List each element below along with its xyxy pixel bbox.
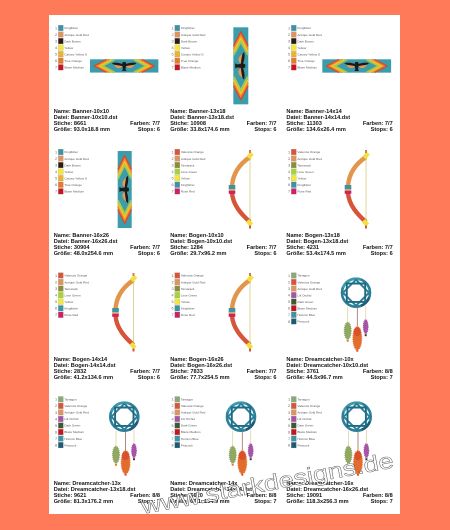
legend: Dreamcatcher-13x thread colours [55, 396, 89, 448]
embroidery: vertical banner [118, 151, 132, 228]
legend: Banner-16x26 thread colours: 5 [55, 177, 57, 181]
details: Banner-10x10: Stops: 6 [138, 127, 160, 133]
details: Dreamcatcher-10x: Stiche: 3761 [286, 369, 319, 375]
legend: Bogen-14x14 thread colours: 7 [55, 313, 57, 317]
details: Dreamcatcher-16x [286, 481, 393, 505]
details: Dreamcatcher-14x: Name: Dreamcatcher-14x [170, 481, 238, 487]
details: Bogen-10x10 [170, 233, 276, 257]
legend: Banner-13x18 thread colours: Blaze Medium [181, 66, 201, 70]
embroidery: bow [229, 273, 254, 352]
legend: Dreamcatcher-13x thread colours: 5 [55, 424, 57, 428]
legend: Bogen-13x18 thread colours: 6 [288, 183, 290, 187]
legend: Bogen-16x26 thread colours: Valencia Orange [181, 274, 204, 278]
details: Banner-16x26: Stiche: 30904 [54, 245, 90, 251]
legend: Bogen-10x10 thread colours: Tamarack [181, 163, 195, 167]
legend: Bogen-16x26 thread colours: Yellow [181, 300, 190, 304]
details: Banner-10x10: Größe: 93.0x18.8 mm [54, 127, 110, 133]
legend: Dreamcatcher-14x thread colours [172, 396, 206, 448]
legend: Dreamcatcher-16x thread colours: Dark Green [297, 424, 314, 428]
legend: Bogen-16x26 thread colours: Antique Gold Red [181, 280, 206, 284]
details: Dreamcatcher-14x: Farben: 8/8 [247, 493, 276, 499]
details: Banner-13x18: Stiche: 10908 [170, 121, 206, 127]
legend: Banner-10x10 thread colours: Yellow [64, 46, 74, 50]
legend: Bogen-14x14 thread colours: Antique Gold Red [64, 280, 89, 284]
legend: Bogen-10x10 thread colours: 2 [172, 157, 174, 161]
legend: Dreamcatcher-10x thread colours: Lilt Orchid [297, 293, 312, 297]
details: Banner-10x10: Name: Banner-10x10 [54, 109, 109, 115]
legend: Banner-10x10 thread colours: 3 [55, 40, 57, 44]
legend: Banner-13x18 thread colours: 6 [172, 59, 174, 63]
legend: Banner-10x10 thread colours: Canary Yellow G [64, 52, 88, 56]
watermark: website address: www.starkdesigns.de [138, 448, 396, 519]
legend: Dreamcatcher-10x thread colours: Peacock [297, 320, 310, 324]
legend: Dreamcatcher-13x thread colours: Horizon Blue [64, 437, 82, 441]
legend: Dreamcatcher-16x thread colours: Lilt Orchid [297, 417, 312, 421]
details: Banner-16x26: Stops: 6 [138, 251, 160, 257]
legend: Banner-16x26 thread colours: Antique Gold Red [64, 157, 89, 161]
catalogue entry: Bogen-14x14 [54, 273, 160, 381]
legend: Dreamcatcher-16x thread colours: Blaze Medium [297, 430, 317, 434]
legend: Banner-16x26 thread colours: Blaze Medium [64, 190, 84, 194]
legend: Bogen-13x18 thread colours: Antique Gold Red [297, 157, 322, 161]
legend: Banner-16x26 thread colours: Kingfisher [64, 150, 78, 154]
legend: Banner-16x26 thread colours: 2 [55, 157, 57, 161]
details: Banner-14x14: Farben: 7/7 [363, 121, 393, 127]
embroidery: dreamcatcher [342, 279, 370, 352]
details: Dreamcatcher-14x: Stops: 7 [254, 499, 276, 505]
legend: Banner-16x26 thread colours: 6 [55, 183, 57, 187]
legend: Banner-14x14 thread colours: 1 [288, 26, 290, 30]
details: Bogen-14x14: Name: Bogen-14x14 [54, 357, 108, 363]
legend: Dreamcatcher-14x thread colours: 1 [172, 398, 174, 402]
legend: Dreamcatcher-14x thread colours: Blaze Medium [181, 430, 201, 434]
legend: Banner-10x10 thread colours: 1 [55, 26, 57, 30]
legend: Bogen-14x14 thread colours: Lime Green [64, 293, 81, 297]
details: Bogen-13x18: Stiche: 4231 [286, 245, 319, 251]
legend: Bogen-14x14 thread colours: Yellow [64, 300, 74, 304]
embroidery: bow [112, 273, 137, 352]
legend: Dreamcatcher-10x thread colours: Blaze Medium [297, 306, 317, 310]
catalogue entry: Dreamcatcher-13x [54, 396, 160, 505]
legend: Banner-13x18 thread colours: Dark Brown [181, 39, 197, 43]
legend: Bogen-14x14 thread colours [55, 273, 89, 318]
details: Bogen-10x10: Stiche: 1284 [170, 245, 204, 251]
legend: Bogen-16x26 thread colours: 6 [172, 307, 174, 311]
legend: Dreamcatcher-14x thread colours: 4 [172, 417, 174, 421]
details: Bogen-14x14: Größe: 41.2x134.6 mm [54, 375, 113, 381]
legend: Banner-14x14 thread colours: 3 [288, 40, 290, 44]
legend: Dreamcatcher-14x thread colours: Peacock [181, 443, 193, 447]
legend: Banner-10x10 thread colours: Dark Brown [64, 39, 81, 43]
legend: Banner-13x18 thread colours: 1 [172, 26, 174, 30]
details: Dreamcatcher-13x: Stops: 7 [138, 499, 160, 505]
details: Bogen-16x26: Datei: Bogen-16x26.dst [170, 363, 232, 369]
legend: Dreamcatcher-14x thread colours: Tarragon [181, 397, 193, 401]
legend: Bogen-14x14 thread colours: 1 [55, 274, 57, 278]
legend: Dreamcatcher-10x thread colours: Dark Green [297, 300, 314, 304]
white sheet panel [49, 15, 400, 514]
details: Dreamcatcher-14x [170, 481, 276, 505]
legend: Bogen-10x10 thread colours: Kingfisher [181, 183, 195, 187]
details: Dreamcatcher-16x: Stops: 7 [371, 499, 393, 505]
details: Banner-16x26: Farben: 7/7 [130, 245, 160, 251]
legend: Banner-13x18 thread colours: Canary Yellow G [181, 52, 204, 56]
legend: Bogen-16x26 thread colours: 4 [172, 294, 174, 298]
legend: Dreamcatcher-10x thread colours: Valencia Orange [297, 280, 320, 284]
legend: Banner-13x18 thread colours: 7 [172, 66, 174, 70]
details: Bogen-16x26 [170, 357, 276, 381]
legend: Dreamcatcher-16x thread colours: Tarragon [297, 397, 310, 401]
legend: Banner-14x14 thread colours: 6 [288, 59, 290, 63]
details: Banner-16x26: Datei: Banner-16x26.dst [54, 239, 118, 245]
legend: Bogen-10x10 thread colours: Rose Red [181, 190, 195, 194]
details: Bogen-16x26: Stops: 6 [254, 375, 276, 381]
legend: Bogen-10x10 thread colours: Antique Gold Red [181, 157, 206, 161]
catalogue entry: Dreamcatcher-16x [286, 396, 393, 505]
legend: Dreamcatcher-10x thread colours: 4 [288, 294, 290, 298]
legend: Banner-14x14 thread colours: Canary Yellow G [297, 52, 321, 56]
legend: Dreamcatcher-16x thread colours: 5 [288, 424, 290, 428]
legend: Bogen-16x26 thread colours [172, 273, 206, 318]
embroidery: dreamcatcher [343, 403, 371, 476]
legend: Bogen-13x18 thread colours: Kingfisher [297, 183, 311, 187]
legend: Dreamcatcher-16x thread colours: 4 [288, 417, 290, 421]
details: Bogen-13x18: Name: Bogen-13x18 [286, 233, 340, 239]
legend: Banner-16x26 thread colours: Yellow [64, 170, 74, 174]
catalogue entry: Dreamcatcher-10x [286, 273, 393, 381]
legend: Dreamcatcher-13x thread colours: 1 [55, 398, 57, 402]
legend: Dreamcatcher-16x thread colours: 1 [288, 398, 290, 402]
details: Dreamcatcher-16x: Farben: 8/8 [363, 493, 393, 499]
legend: Bogen-10x10 thread colours: 4 [172, 170, 174, 174]
legend: Bogen-14x14 thread colours: 5 [55, 300, 57, 304]
legend: Banner-14x14 thread colours: Antique Gold Red [297, 33, 322, 37]
legend: Banner-13x18 thread colours [172, 25, 206, 70]
catalogue entry: Dreamcatcher-14x [170, 396, 276, 505]
legend: Dreamcatcher-14x thread colours: 7 [172, 437, 174, 441]
details: Bogen-16x26: Größe: 77.7x254.5 mm [170, 375, 230, 381]
embroidery: horizontal banner [322, 59, 391, 73]
catalogue entry: Bogen-10x10 [170, 149, 276, 257]
legend: Dreamcatcher-10x thread colours: 8 [288, 320, 290, 324]
legend: Banner-10x10 thread colours: 2 [55, 33, 57, 37]
details: Bogen-14x14: Stops: 6 [138, 375, 160, 381]
details: Banner-13x18 [170, 109, 276, 133]
legend: Banner-10x10 thread colours: 5 [55, 53, 57, 57]
details: Dreamcatcher-10x: Stops: 7 [371, 375, 393, 381]
details: Banner-10x10: Stiche: 8661 [54, 121, 86, 127]
embroidery: dreamcatcher [227, 403, 255, 476]
details: Banner-13x18: Farben: 7/7 [247, 121, 276, 127]
legend: Bogen-16x26 thread colours: Tamarack [181, 287, 195, 291]
details: Banner-14x14: Größe: 134.6x26.4 mm [286, 127, 346, 133]
legend: Bogen-13x18 thread colours: Rose Red [297, 190, 311, 194]
legend: Dreamcatcher-14x thread colours: Horizon Blue [181, 437, 199, 441]
details: Dreamcatcher-16x: Name: Dreamcatcher-16x [286, 481, 354, 487]
catalogue entry: Bogen-16x26 [170, 273, 276, 381]
legend: Dreamcatcher-13x thread colours: Tarragon [64, 397, 77, 401]
details: Bogen-16x26: Farben: 7/7 [247, 369, 276, 375]
legend: Banner-14x14 thread colours: 2 [288, 33, 290, 37]
legend: Dreamcatcher-13x thread colours: 4 [55, 417, 57, 421]
legend: Dreamcatcher-10x thread colours: Horizon Blue [297, 313, 315, 317]
embroidery: horizontal banner [90, 59, 158, 73]
legend: Dreamcatcher-16x thread colours: Antique Gold Red [297, 411, 322, 415]
legend: Banner-10x10 thread colours: 6 [55, 59, 57, 63]
legend: Dreamcatcher-10x thread colours: 3 [288, 287, 290, 291]
legend: Bogen-14x14 thread colours: Tamarack [64, 287, 78, 291]
legend: Bogen-14x14 thread colours: Valencia Orange [64, 274, 87, 278]
legend: Bogen-10x10 thread colours: 6 [172, 183, 174, 187]
legend: Banner-14x14 thread colours: 4 [288, 46, 290, 50]
legend: Banner-13x18 thread colours: Kingfisher [181, 26, 195, 30]
legend: Dreamcatcher-14x thread colours: 5 [172, 424, 174, 428]
legend: Dreamcatcher-13x thread colours: 7 [55, 437, 57, 441]
details: Dreamcatcher-13x: Datei: Dreamcatcher-13x18.dst [54, 487, 136, 493]
legend: Bogen-13x18 thread colours: 3 [288, 164, 290, 168]
legend: Bogen-10x10 thread colours [172, 149, 206, 194]
details: Bogen-10x10: Name: Bogen-10x10 [170, 233, 224, 239]
legend: Dreamcatcher-13x thread colours: Blaze Medium [64, 430, 84, 434]
details: Dreamcatcher-16x: Stiche: 19091 [286, 493, 322, 499]
details: Banner-16x26: Größe: 48.0x254.6 mm [54, 251, 113, 257]
legend: Bogen-14x14 thread colours: Rose Red [64, 313, 78, 317]
details: Dreamcatcher-13x [54, 481, 160, 505]
legend: Banner-14x14 thread colours: Yellow [297, 46, 307, 50]
details: Banner-14x14 [286, 109, 393, 133]
details: Dreamcatcher-13x: Stiche: 9621 [54, 493, 86, 499]
legend: Banner-14x14 thread colours: True Orange [297, 59, 315, 63]
catalogue entry: Banner-10x10 [54, 25, 160, 133]
legend: Dreamcatcher-10x thread colours: Antique Gold Red [297, 287, 322, 291]
details: Banner-13x18: Stops: 6 [254, 127, 276, 133]
details: Bogen-16x26: Stiche: 7833 [170, 369, 203, 375]
legend: Dreamcatcher-16x thread colours: 2 [288, 404, 290, 408]
legend: Banner-13x18 thread colours: 2 [172, 33, 174, 37]
legend: Dreamcatcher-14x thread colours: 6 [172, 430, 174, 434]
legend: Banner-16x26 thread colours: 3 [55, 164, 57, 168]
legend: Banner-13x18 thread colours: 5 [172, 53, 174, 57]
legend: Banner-13x18 thread colours: Antique Gold Red [181, 33, 206, 37]
details: Bogen-14x14: Stiche: 2832 [54, 369, 86, 375]
legend: Banner-16x26 thread colours: 4 [55, 170, 57, 174]
catalogue entry: Bogen-13x18 [286, 149, 393, 257]
legend: Banner-16x26 thread colours: Canary Yellow G [64, 176, 88, 180]
details: Banner-10x10 [54, 109, 160, 133]
legend: Bogen-10x10 thread colours: Yellow [181, 176, 190, 180]
embroidery: dreamcatcher [110, 403, 138, 476]
legend: Dreamcatcher-13x thread colours: 3 [55, 411, 57, 415]
legend: Dreamcatcher-10x thread colours: 5 [288, 300, 290, 304]
legend: Dreamcatcher-13x thread colours: 6 [55, 430, 57, 434]
legend: Bogen-16x26 thread colours: 5 [172, 300, 174, 304]
legend: Banner-14x14 thread colours [288, 25, 322, 70]
details: Banner-10x10: Farben: 7/7 [130, 121, 160, 127]
details: Banner-13x18: Größe: 33.8x174.6 mm [170, 127, 230, 133]
legend: Bogen-13x18 thread colours: 7 [288, 190, 290, 194]
legend: Banner-16x26 thread colours: 1 [55, 150, 57, 154]
legend: Dreamcatcher-10x thread colours: 2 [288, 280, 290, 284]
legend: Banner-13x18 thread colours: 3 [172, 40, 174, 44]
legend: Bogen-16x26 thread colours: 1 [172, 274, 174, 278]
legend: Dreamcatcher-13x thread colours: 8 [55, 444, 57, 448]
legend: Bogen-10x10 thread colours: Valencia Orange [181, 150, 204, 154]
details: Dreamcatcher-16x: Datei: Dreamcatcher-16x26.dst [286, 487, 368, 493]
legend: Bogen-13x18 thread colours: 4 [288, 170, 290, 174]
details: Dreamcatcher-10x: Name: Dreamcatcher-10x [286, 357, 354, 363]
legend: Dreamcatcher-14x thread colours: 8 [172, 444, 174, 448]
legend: Dreamcatcher-14x thread colours: Antique Gold Red [181, 411, 206, 415]
legend: Dreamcatcher-16x thread colours: 6 [288, 430, 290, 434]
legend: Banner-14x14 thread colours: Dark Brown [297, 39, 314, 43]
legend: Dreamcatcher-16x thread colours: Valencia Orange [297, 404, 320, 408]
legend: Bogen-10x10 thread colours: 7 [172, 190, 174, 194]
details: Dreamcatcher-13x: Farben: 8/8 [130, 493, 160, 499]
legend: Bogen-13x18 thread colours [288, 149, 322, 194]
legend: Banner-10x10 thread colours: 7 [55, 66, 57, 70]
legend: Banner-10x10 thread colours: Antique Gold Red [64, 33, 89, 37]
legend: Bogen-16x26 thread colours: Rose Red [181, 313, 195, 317]
legend: Bogen-13x18 thread colours: 1 [288, 150, 290, 154]
legend: Banner-14x14 thread colours: Blaze Medium [297, 66, 317, 70]
details: Bogen-14x14 [54, 357, 160, 381]
legend: Bogen-14x14 thread colours: Kingfisher [64, 306, 78, 310]
legend: Dreamcatcher-14x thread colours: Dark Green [181, 424, 197, 428]
legend: Banner-13x18 thread colours: True Orange [181, 59, 199, 63]
legend: Bogen-13x18 thread colours: Valencia Orange [297, 150, 320, 154]
details: Bogen-14x14: Farben: 7/7 [130, 369, 160, 375]
details: Bogen-16x26: Name: Bogen-16x26 [170, 357, 224, 363]
legend: Dreamcatcher-16x thread colours: 7 [288, 437, 290, 441]
legend: Dreamcatcher-13x thread colours: Lilt Orchid [64, 417, 79, 421]
embroidery: bow [229, 150, 254, 228]
legend: Bogen-10x10 thread colours: 3 [172, 164, 174, 168]
legend: Bogen-13x18 thread colours: 5 [288, 177, 290, 181]
details: Dreamcatcher-16x: Größe: 118.3x256.3 mm [286, 499, 349, 505]
details: Bogen-13x18 [286, 233, 393, 257]
legend: Bogen-16x26 thread colours: Kingfisher [181, 306, 195, 310]
legend: Banner-16x26 thread colours: True Orange [64, 183, 82, 187]
legend: Dreamcatcher-10x thread colours: Tarragon [297, 274, 310, 278]
details: Bogen-13x18: Farben: 7/7 [363, 245, 393, 251]
legend: Banner-14x14 thread colours: Kingfisher [297, 26, 311, 30]
legend: Bogen-10x10 thread colours: 1 [172, 150, 174, 154]
legend: Dreamcatcher-14x thread colours: Valencia Orange [181, 404, 204, 408]
details: Dreamcatcher-14x: Datei: Dreamcatcher-14x14.dst [170, 487, 252, 493]
legend: Bogen-14x14 thread colours: 4 [55, 294, 57, 298]
legend: Banner-14x14 thread colours: 7 [288, 66, 290, 70]
legend: Banner-10x10 thread colours: Blaze Medium [64, 66, 84, 70]
details: Banner-14x14: Stiche: 11303 [286, 121, 322, 127]
legend: Bogen-16x26 thread colours: 7 [172, 313, 174, 317]
legend: Banner-14x14 thread colours: 5 [288, 53, 290, 57]
catalogue entry: Banner-16x26 [54, 149, 160, 257]
legend: Dreamcatcher-13x thread colours: Dark Green [64, 424, 81, 428]
legend: Banner-13x18 thread colours: Yellow [181, 46, 190, 50]
details: Dreamcatcher-10x: Datei: Dreamcatcher-10x10.dst [286, 363, 368, 369]
details: Bogen-13x18: Datei: Bogen-13x18.dst [286, 239, 348, 245]
details: Dreamcatcher-14x: Stiche: 6620 [170, 493, 203, 499]
catalogue entry: Banner-14x14 [286, 25, 393, 133]
legend: Dreamcatcher-13x thread colours: 2 [55, 404, 57, 408]
legend: Bogen-13x18 thread colours: 2 [288, 157, 290, 161]
legend: Dreamcatcher-16x thread colours: 3 [288, 411, 290, 415]
details: Bogen-10x10: Größe: 29.7x96.2 mm [170, 251, 227, 257]
legend: Bogen-10x10 thread colours: Lime Green [181, 170, 197, 174]
legend: Dreamcatcher-13x thread colours: Antique Gold Red [64, 411, 89, 415]
details: Bogen-10x10: Stops: 6 [254, 251, 276, 257]
details: Dreamcatcher-13x: Größe: 81.3x176.2 mm [54, 499, 113, 505]
details: Dreamcatcher-10x: Farben: 8/8 [363, 369, 393, 375]
legend: Banner-10x10 thread colours: True Orange [64, 59, 82, 63]
legend: Dreamcatcher-13x thread colours: Peacock [64, 443, 77, 447]
legend: Dreamcatcher-16x thread colours [288, 396, 322, 448]
details: Banner-14x14: Stops: 6 [371, 127, 393, 133]
legend: Dreamcatcher-14x thread colours: Lilt Orchid [181, 417, 195, 421]
legend: Dreamcatcher-10x thread colours: 6 [288, 307, 290, 311]
details: Bogen-13x18: Stops: 6 [371, 251, 393, 257]
legend: Bogen-16x26 thread colours: 2 [172, 280, 174, 284]
legend: Bogen-10x10 thread colours: 5 [172, 177, 174, 181]
legend: Banner-10x10 thread colours: Kingfisher [64, 26, 78, 30]
legend: Dreamcatcher-10x thread colours: 1 [288, 274, 290, 278]
legend: Bogen-14x14 thread colours: 2 [55, 280, 57, 284]
legend: Banner-16x26 thread colours: Dark Brown [64, 163, 81, 167]
legend: Banner-10x10 thread colours [55, 25, 89, 70]
legend: Dreamcatcher-14x thread colours: 2 [172, 404, 174, 408]
legend: Dreamcatcher-14x thread colours: 3 [172, 411, 174, 415]
legend: Bogen-14x14 thread colours: 3 [55, 287, 57, 291]
legend: Dreamcatcher-16x thread colours: Horizon Blue [297, 437, 315, 441]
legend: Bogen-13x18 thread colours: Yellow [297, 176, 307, 180]
legend: Banner-16x26 thread colours [55, 149, 89, 194]
details: Banner-13x18: Name: Banner-13x18 [170, 109, 226, 115]
details: Bogen-13x18: Größe: 53.4x174.5 mm [286, 251, 346, 257]
embroidery: vertical banner [233, 27, 248, 104]
legend: Banner-16x26 thread colours: 7 [55, 190, 57, 194]
legend: Bogen-13x18 thread colours: Tamarack [297, 163, 311, 167]
legend: Banner-13x18 thread colours: 4 [172, 46, 174, 50]
details: Bogen-10x10: Datei: Bogen-10x10.dst [170, 239, 232, 245]
legend: Dreamcatcher-16x thread colours: 8 [288, 444, 290, 448]
legend: Bogen-16x26 thread colours: Lime Green [181, 293, 197, 297]
details: Banner-16x26 [54, 233, 160, 257]
details: Bogen-10x10: Farben: 7/7 [247, 245, 276, 251]
legend: Banner-10x10 thread colours: 4 [55, 46, 57, 50]
legend: Dreamcatcher-16x thread colours: Peacock [297, 443, 310, 447]
details: Banner-14x14: Datei: Banner-14x14.dst [286, 115, 350, 121]
legend: Dreamcatcher-10x thread colours: 7 [288, 313, 290, 317]
details: Dreamcatcher-13x: Name: Dreamcatcher-13x [54, 481, 122, 487]
details: Banner-16x26: Name: Banner-16x26 [54, 233, 109, 239]
details: Bogen-14x14: Datei: Bogen-14x14.dst [54, 363, 116, 369]
legend: Bogen-14x14 thread colours: 6 [55, 307, 57, 311]
details: Banner-13x18: Datei: Banner-13x18.dst [170, 115, 234, 121]
details: Dreamcatcher-14x: Größe: 66.1x134.9 mm [170, 499, 230, 505]
legend: Dreamcatcher-10x thread colours [288, 273, 322, 324]
details: Dreamcatcher-10x [286, 357, 393, 381]
legend: Bogen-13x18 thread colours: Lime Green [297, 170, 314, 174]
details: Banner-14x14: Name: Banner-14x14 [286, 109, 343, 115]
details: Dreamcatcher-10x: Größe: 44.5x96.7 mm [286, 375, 343, 381]
catalogue entry: Banner-13x18 [170, 25, 276, 133]
details: Banner-10x10: Datei: Banner-10x10.dst [54, 115, 118, 121]
embroidery: bow [345, 150, 370, 228]
legend: Dreamcatcher-13x thread colours: Valencia Orange [64, 404, 87, 408]
legend: Bogen-16x26 thread colours: 3 [172, 287, 174, 291]
